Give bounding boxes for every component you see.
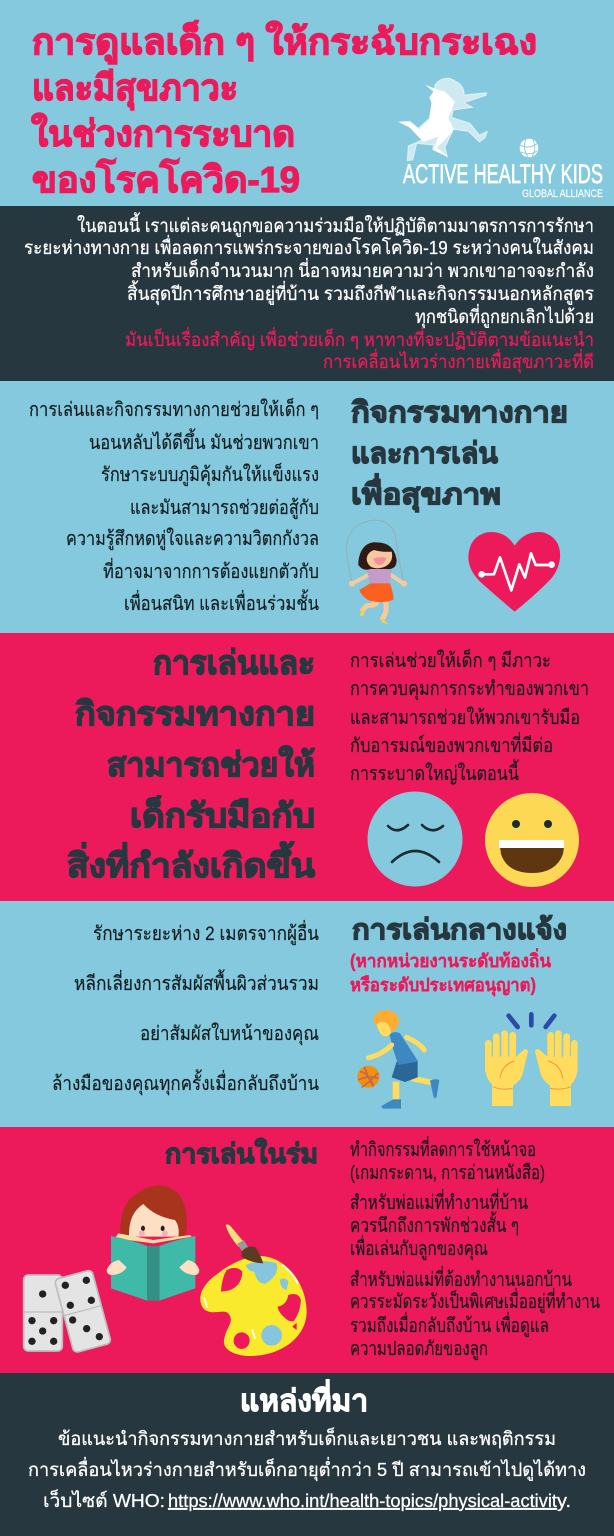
body text: ทำกิจกรรมที่ลดการใช้หน้าจอ <box>350 1136 536 1161</box>
panel: outdoor play <box>0 901 614 1127</box>
intro text <box>24 212 594 329</box>
subheading: หรือระดับประเทศอนุญาต) <box>350 975 536 997</box>
heading: เพื่อสุขภาพ <box>351 473 501 512</box>
body text: เพื่อนสนิท และเพื่อนร่วมชั้น <box>124 589 319 615</box>
heading: กิจกรรมทางกาย <box>351 397 568 429</box>
subheading <box>350 948 552 997</box>
body text: สำหรับพ่อแม่ที่ทำงานที่บ้าน <box>350 1189 528 1214</box>
logo: Active Healthy Kids <box>399 78 603 200</box>
source text <box>28 1426 586 1511</box>
heading: สามารถช่วยให้ <box>107 745 315 783</box>
guidance list: รักษาระยะห่าง 2 เมตรจากผู้อื่น <box>93 920 319 946</box>
panel: header <box>0 0 614 206</box>
icon: happy face <box>485 793 579 887</box>
body text: การระบาดใหญ่ในตอนนี้ <box>350 759 519 785</box>
subheading: (หากหน่วยงานระดับท้องถิ่น <box>350 948 552 971</box>
icon: heart with pulse <box>468 532 560 612</box>
icon: globe <box>520 139 538 157</box>
body text: ควรนึกถึงการพักช่วงสั้น ๆ <box>350 1211 519 1237</box>
panel: indoor play <box>0 1127 614 1373</box>
icon: child reading a book <box>107 1186 199 1301</box>
body text <box>29 397 319 615</box>
guidance list <box>52 920 319 1096</box>
icon: raised hands <box>485 1014 578 1106</box>
source text: เว็บไซต์ WHO: <box>43 1488 165 1511</box>
body text: การเล่นช่วยให้เด็ก ๆ มีภาวะ <box>350 648 551 672</box>
body text: รวมถึงเมื่อกลับถึงบ้าน เพื่อดูแล <box>350 1312 549 1338</box>
guidance list: หลีกเลี่ยงการสัมผัสพื้นผิวส่วนรวม <box>74 969 319 995</box>
source text: ข้อแนะนำกิจกรรมทางกายสำหรับเด็กและเยาวชน และพฤติกรรม <box>58 1426 556 1449</box>
body text: ที่อาจมาจากการต้องแยกตัวกับ <box>103 558 319 583</box>
title: การดูแลเด็ก ๆ ให้กระฉับกระเฉง <box>32 19 537 65</box>
heading: เด็กรับมือกับ <box>130 795 315 834</box>
icon: paint palette and brush <box>200 1224 307 1356</box>
body text: รักษาระบบภูมิคุ้มกันให้แข็งแรง <box>101 462 319 487</box>
heading: และการเล่น <box>351 438 498 470</box>
body text: (เกมกระดาน, การอ่านหนังสือ) <box>350 1162 545 1184</box>
intro text: สิ้นสุดปีการศึกษาอยู่ที่บ้าน รวมถึงกีฬาและกิจกรรมนอกหลักสูตร <box>127 280 594 306</box>
source text: y. <box>557 1490 571 1511</box>
heading: สิ่งที่กำลังเกิดขึ้น <box>67 841 315 884</box>
heading <box>67 644 315 884</box>
heading: การเล่นในร่ม <box>165 1138 318 1169</box>
body text: การเล่นและกิจกรรมทางกายช่วยให้เด็ก ๆ <box>29 397 319 421</box>
panel: introduction <box>0 206 614 381</box>
icon: sad face <box>368 792 462 886</box>
intro highlight: การเคลื่อนไหวร่างกายเพื่อสุขภาวะที่ดี <box>323 349 594 374</box>
heading <box>351 397 568 512</box>
source text: การเคลื่อนไหวร่างกายสำหรับเด็กอายุต่ำกว่า 5 ปี สามารถเข้าไปดูได้ทาง <box>28 1457 586 1482</box>
body text: นอนหลับได้ดีขึ้น มันช่วยพวกเขา <box>89 428 319 454</box>
source text: https://www.who.int/health-topics/physical-activit <box>168 1490 557 1511</box>
title: และมีสุขภาวะ <box>32 67 238 111</box>
body text: เพื่อเล่นกับลูกของคุณ <box>350 1235 488 1261</box>
guidance list: ล้างมือของคุณทุกครั้งเมื่อกลับถึงบ้าน <box>52 1069 319 1096</box>
panel: play helps children cope <box>0 633 614 901</box>
panel: physical activity and play <box>0 381 614 633</box>
guidance list: อย่าสัมผัสใบหน้าของคุณ <box>140 1022 319 1046</box>
body text: และมันสามารถช่วยต่อสู้กับ <box>130 497 319 520</box>
intro highlight <box>125 327 594 374</box>
heading: แหล่งที่มา <box>240 1379 368 1418</box>
heading: การเล่นกลางแจ้ง <box>352 914 567 945</box>
title <box>31 19 537 200</box>
title: ในช่วงการระบาด <box>31 112 295 154</box>
body text: กับอารมณ์ของพวกเขาที่มีต่อ <box>350 732 553 757</box>
heading: การเล่นและ <box>153 644 315 681</box>
intro text: ทุกชนิดที่ถูกยกเลิกไปด้วย <box>415 304 594 329</box>
icon: dominoes <box>24 1270 111 1353</box>
icon: child dribbling basketball <box>357 1010 439 1109</box>
heading: กิจกรรมทางกาย <box>75 695 315 732</box>
title: ของโรคโควิด-19 <box>32 158 300 200</box>
body text <box>350 648 589 785</box>
body text: ความปลอดภัยของลูก <box>350 1338 488 1361</box>
panel: sources <box>0 1373 614 1536</box>
body text <box>350 1136 600 1361</box>
icon: running children <box>399 78 487 161</box>
body text: ความรู้สึกหดหู่ใจและความวิตกกังวล <box>66 527 319 551</box>
icon: girl skipping rope <box>347 520 407 623</box>
